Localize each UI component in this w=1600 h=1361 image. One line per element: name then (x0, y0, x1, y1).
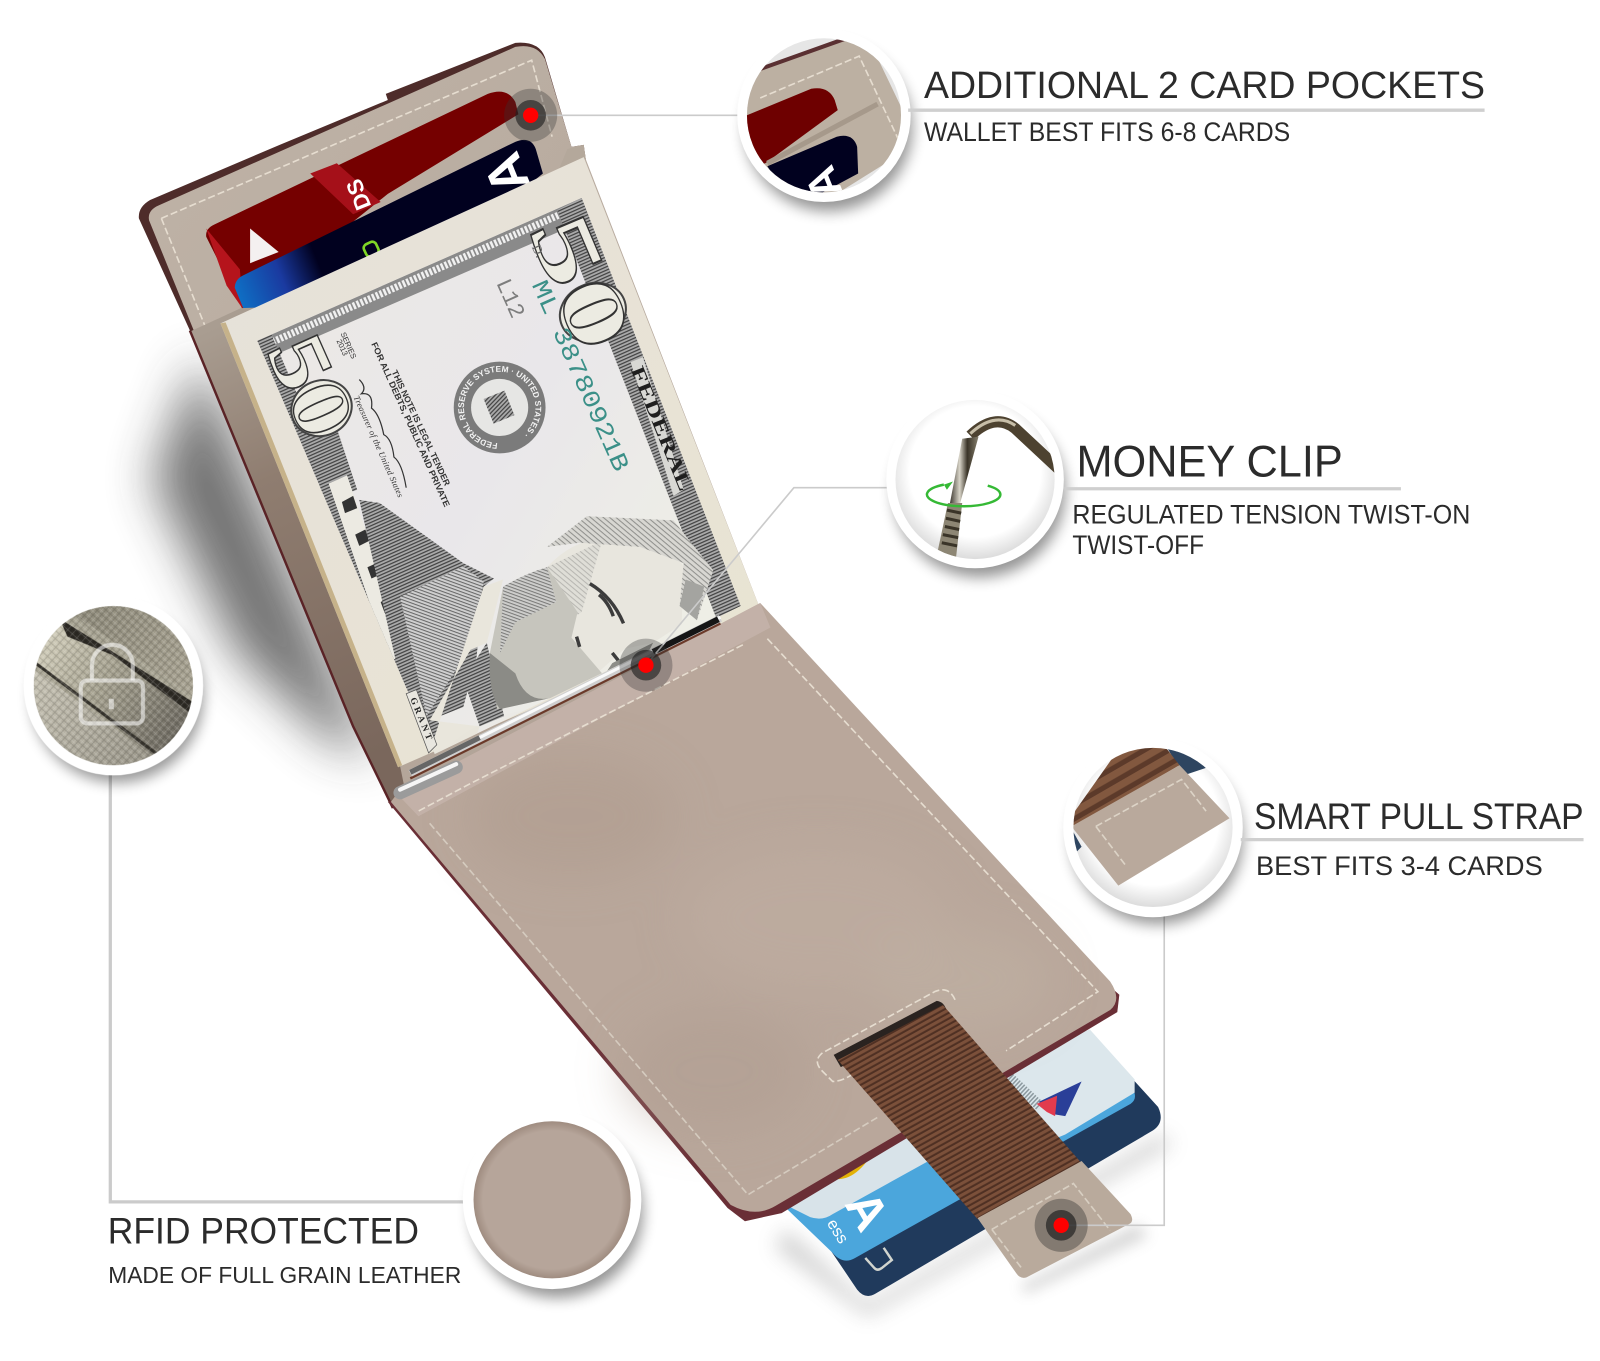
ribbed strap (838, 1005, 1082, 1219)
navy credit card (235, 140, 543, 312)
portrait: face (547, 539, 684, 673)
silver card right (985, 1029, 1135, 1153)
detail circle: card pockets: A (796, 159, 852, 206)
bottom cards: d (789, 1174, 810, 1190)
maroon outer edge (388, 796, 1119, 1221)
leather blotches (469, 755, 1051, 1132)
portrait: hair (547, 516, 713, 620)
portrait: coat (359, 500, 494, 720)
money clip bar (400, 617, 720, 793)
serial number: ML 38780921B (524, 277, 633, 476)
marker: pull strap (1035, 1199, 1088, 1252)
card small text: ess (823, 1216, 852, 1247)
paper edges (221, 157, 760, 767)
series label: 2013 (335, 338, 350, 357)
tan inner lining (149, 46, 760, 806)
front wallet panel (388, 603, 1119, 1221)
plate letter: D. (529, 242, 548, 260)
detail circle: RFID lock fabric (24, 596, 204, 783)
detail circle: twist clip (886, 391, 1065, 577)
detail circle: card pockets (735, 29, 918, 211)
wallet cast shadow (153, 357, 1171, 1316)
portrait: collar and shirt (429, 579, 503, 755)
callout: money clip (886, 391, 1470, 577)
FEDERAL label: FEDERAL (626, 363, 695, 494)
heading: additional 2 card pockets: ADDITIONAL 2 CARD POCKETS (924, 64, 1485, 106)
wallet back panel (139, 43, 760, 808)
callout: RFID protected (108, 1111, 643, 1298)
heading: RFID protected: RFID PROTECTED (108, 1211, 419, 1252)
sky blue card (782, 1051, 1135, 1261)
portrait: eyes and nose (577, 584, 625, 668)
bottom cards (780, 1029, 1161, 1296)
top fold band (397, 603, 770, 816)
callout: smart pull strap (1063, 738, 1584, 924)
bill face (257, 198, 741, 754)
card letter A: A (834, 1182, 899, 1240)
numeral 50 top: 50 (510, 200, 651, 364)
series label: SERIES (339, 331, 358, 360)
card letter A: A (473, 145, 542, 202)
silver card left (780, 1120, 929, 1219)
subheading: regulated tension: REGULATED TENSION TWIST-ON (1072, 499, 1470, 529)
maroon leather edge (139, 43, 586, 808)
lower pocket lining (190, 306, 408, 808)
stitching (418, 645, 743, 811)
treasurer signature: Treasurer of the United States (352, 394, 406, 499)
marker: money clip (619, 639, 672, 692)
sheet position L12: L12 (490, 275, 530, 322)
legal tender text: FOR ALL DEBTS, PUBLIC AND PRIVATE (369, 341, 452, 509)
marker: card pockets (504, 89, 557, 142)
heading: money clip: MONEY CLIP (1076, 435, 1343, 486)
top lathe border (257, 198, 590, 359)
detail circle: strap tab (1063, 738, 1243, 924)
legal tender text: THIS NOTE IS LEGAL TENDER (390, 368, 453, 488)
detail circle: leather swatch (463, 1111, 643, 1298)
pull strap (834, 1001, 1132, 1278)
navy card (806, 1051, 1161, 1296)
GRANT label: GRANT (408, 696, 435, 741)
left lathe band (257, 335, 449, 754)
portrait: beard (490, 567, 602, 709)
card text DS: DS (341, 175, 376, 214)
subheading: best fits: BEST FITS 3-4 CARDS (1256, 851, 1543, 881)
federal reserve seal: FEDERAL RESERVE SYSTEM · UNITED STATES · (458, 366, 542, 449)
leather tab (978, 1161, 1132, 1278)
numeral 50 top (510, 200, 651, 364)
GRANT label (406, 690, 437, 753)
icon: padlock (81, 645, 143, 723)
numeral 50 left: 50 (249, 320, 374, 450)
subheading: full grain leather: MADE OF FULL GRAIN LEATHER (108, 1262, 461, 1288)
slot (834, 1001, 947, 1067)
subheading: wallet best fits: WALLET BEST FITS 6-8 CARDS (924, 117, 1290, 147)
right FEDERAL band (557, 198, 741, 618)
callout: additional card pockets (735, 29, 1485, 211)
tan lining (391, 603, 1116, 1212)
banknote stack (220, 157, 758, 768)
leader lines (110, 115, 1164, 1225)
red credit card (206, 92, 518, 310)
subheading: regulated tension: TWIST-OFF (1072, 530, 1204, 560)
